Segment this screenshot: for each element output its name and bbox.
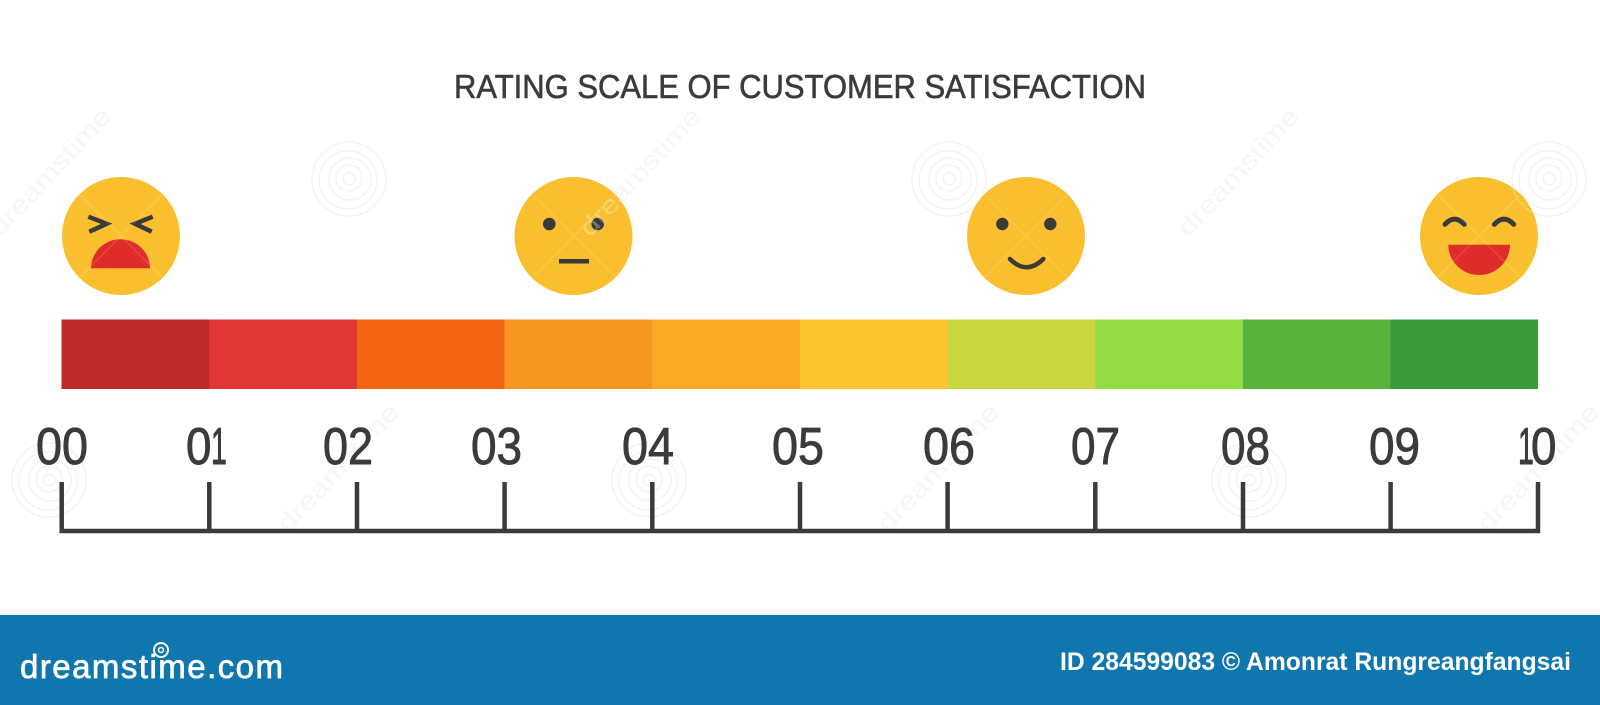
title: RATING SCALE OF CUSTOMER SATISFACTION (454, 68, 1146, 105)
scale numbers: 03 (471, 418, 522, 476)
watermark: spirals and diagonal text (0, 102, 1600, 538)
scale numbers: 00 (36, 418, 88, 476)
scale numbers: 02 (323, 418, 373, 476)
image ID and author credit: ID 284599083 © Amonrat Rungreangfangsai (1060, 648, 1571, 676)
emoji: very satisfied face (1420, 177, 1538, 295)
colour rating bar (62, 320, 1538, 389)
ruler scale with tick marks (62, 482, 1538, 531)
scale numbers: 07 (1071, 418, 1120, 476)
faint watermark overlay on faces and bar (0, 102, 1600, 538)
scale numbers: 05 (772, 418, 824, 476)
scale numbers: 0 (186, 418, 211, 476)
scale numbers: 06 (923, 418, 975, 476)
scale numbers (36, 417, 1556, 476)
emoji: neutral face (514, 177, 632, 295)
emoji: very dissatisfied face (62, 177, 180, 295)
scale numbers: 08 (1221, 418, 1270, 476)
footer band (0, 615, 1600, 705)
emoji: satisfied face (967, 177, 1085, 295)
scale numbers: 1 (1518, 417, 1534, 475)
scale numbers: 09 (1369, 418, 1420, 476)
logo: dreamstime.com: dreamstime.com (20, 648, 283, 685)
scale numbers: 04 (622, 418, 674, 476)
scale numbers: 0 (1531, 418, 1556, 476)
scale numbers: 1 (211, 417, 227, 475)
